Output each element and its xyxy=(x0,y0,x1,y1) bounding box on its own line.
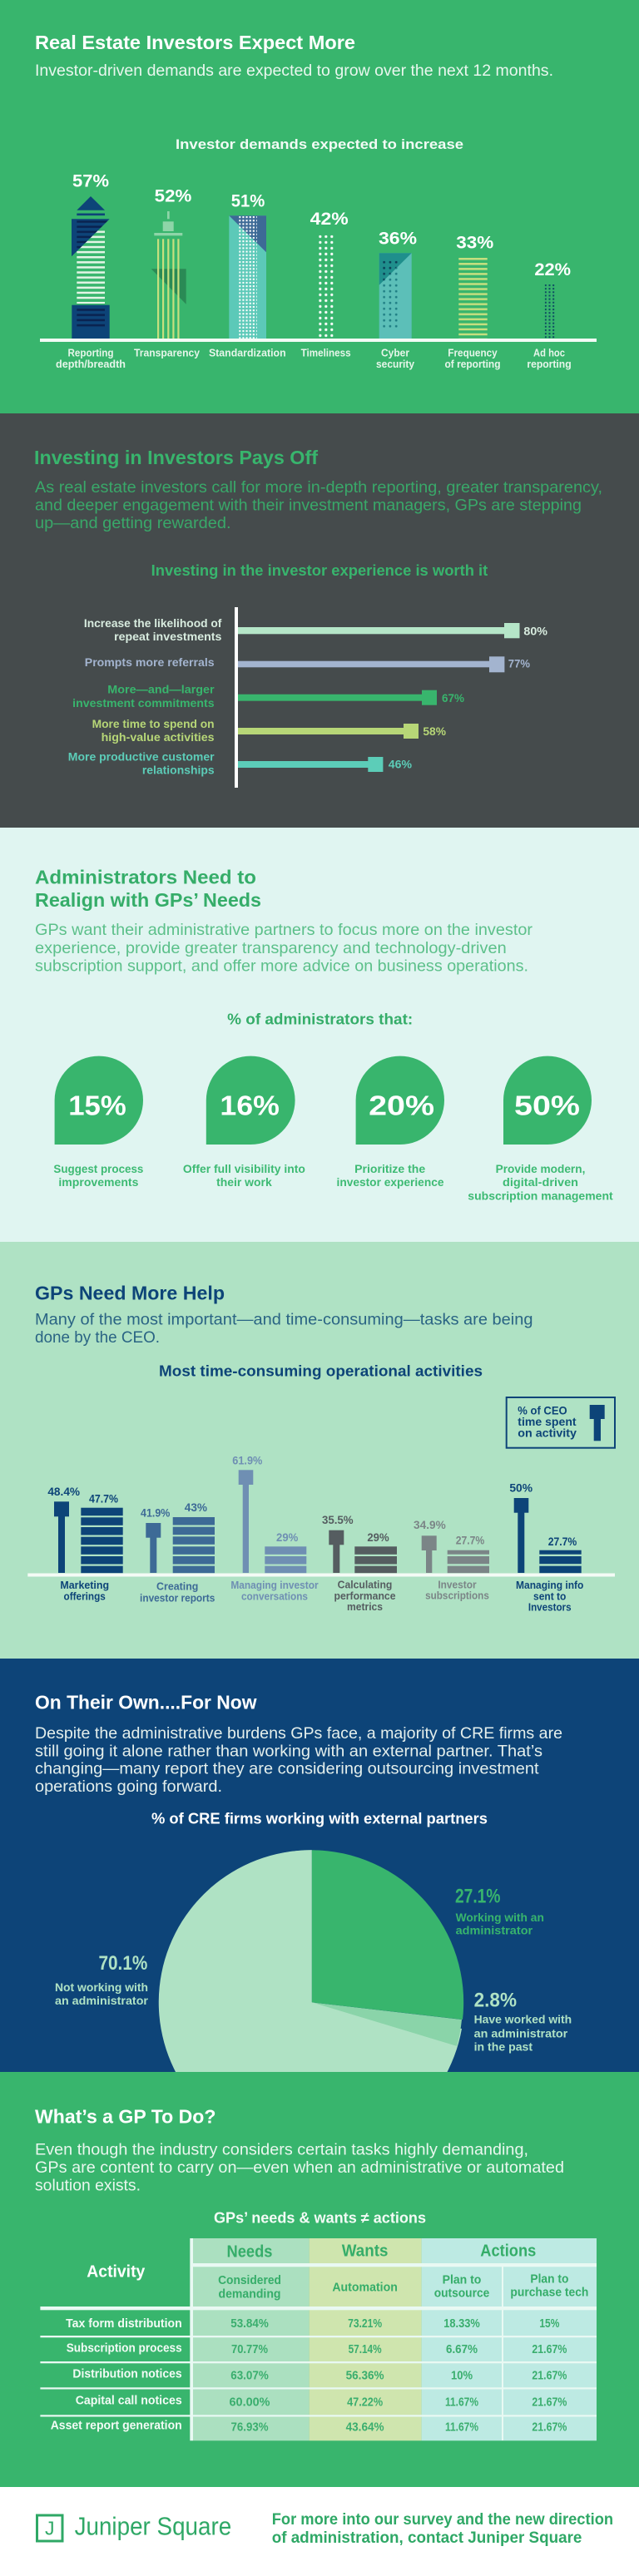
bars: managing investor conversations: 61.9% xyxy=(232,1453,263,1466)
bars: managing investor conversations: Managing investor xyxy=(230,1580,319,1591)
bars: managing info sent to investors: Investors xyxy=(528,1602,572,1614)
heading: investing in investors pays off: Investing in Investors Pays Off xyxy=(34,447,318,468)
legend: percent of CEO time: on activity xyxy=(518,1427,577,1440)
row values: 56.36% xyxy=(346,2370,384,2383)
intro text: experience, provide greater transparency and technology-driven xyxy=(35,939,507,957)
building bar: reporting depth/breadth 57%: 57% xyxy=(72,172,109,191)
column headers: outsource xyxy=(434,2287,489,2301)
heading: what's a GP to do: What’s a GP To Do? xyxy=(35,2106,216,2128)
stat: 20% prioritize investor experience: Prioritize the xyxy=(354,1163,426,1175)
bar: high-value activities 58%: 58% xyxy=(423,724,447,738)
bars: calculating performance metrics: 29% xyxy=(367,1530,389,1544)
building bar: transparency 52%: 52% xyxy=(155,186,192,205)
table grid lines xyxy=(40,2238,597,2440)
call to action: of administration, contact Juniper Square xyxy=(272,2529,582,2547)
row values: 47.22% xyxy=(347,2396,383,2409)
heading: administrators need to realign xyxy=(35,866,261,911)
bars: calculating performance metrics xyxy=(322,1513,397,1613)
call to action: For more into our survey and the new direction xyxy=(272,2511,613,2529)
bars: managing info sent to investors: sent to xyxy=(533,1590,567,1602)
bars: managing investor conversations: 29% xyxy=(276,1530,299,1544)
building bar: transparency 52% xyxy=(151,186,192,339)
building bar: standardization 51% xyxy=(229,192,266,339)
column headers: Plan to xyxy=(443,2274,482,2287)
bars: creating investor reports: 43% xyxy=(185,1501,208,1514)
bar: high-value activities 58%: More time to spend on xyxy=(92,718,215,730)
column headers: Needs xyxy=(226,2242,273,2261)
bar labels: depth/breadth xyxy=(56,358,126,370)
chart title: most time-consuming activities: Most time-consuming operational activities xyxy=(159,1362,483,1379)
stat: 16% full visibility xyxy=(183,1056,305,1189)
stat: 20% prioritize investor experience: 20% xyxy=(369,1090,434,1121)
striped bar: frequency of reporting 33%: 33% xyxy=(456,233,494,252)
stat: 15% suggest process improvements: improvements xyxy=(58,1176,138,1189)
panel: what's a GP to do xyxy=(0,2072,639,2487)
stat: 50% digital subscription management: Provide modern, xyxy=(496,1163,585,1175)
bars: managing info sent to investors: 27.7% xyxy=(548,1535,577,1548)
bar: customer relationships 46%: relationships xyxy=(142,764,215,776)
chart baseline xyxy=(27,1574,615,1577)
bar labels: Ad hoc xyxy=(533,348,565,359)
bar labels xyxy=(56,348,572,370)
bar labels: Standardization xyxy=(209,348,286,359)
pie label: 27.1% working with an administrator xyxy=(455,1885,544,1937)
intro text xyxy=(35,1311,532,1347)
bars: managing investor conversations: conversations xyxy=(241,1590,308,1602)
intro text: up—and getting rewarded. xyxy=(35,514,231,532)
intro text: GPs want their administrative partners to focus more on the investor xyxy=(35,921,533,939)
bar labels: Transparency xyxy=(134,348,200,359)
call to action xyxy=(272,2511,613,2547)
heading: on their own for now: On Their Own....For Now xyxy=(35,1691,257,1713)
row labels: Subscription process xyxy=(67,2341,182,2355)
intro text xyxy=(35,478,602,532)
row values: 70.77% xyxy=(231,2343,268,2356)
bar labels: Reporting xyxy=(68,348,113,359)
column headers: Activity xyxy=(87,2262,146,2281)
bars: calculating performance metrics: 35.5% xyxy=(322,1513,354,1526)
column headers: Wants xyxy=(342,2242,388,2261)
intro text: Despite the administrative burdens GPs face, a majority of CRE firms are xyxy=(35,1724,562,1743)
building bar: reporting depth/breadth 57% xyxy=(72,172,110,339)
panel: GPs need more help xyxy=(0,1242,639,1659)
row labels: Tax form distribution xyxy=(66,2317,182,2331)
bar: repeat investments 80%: Increase the likelihood of xyxy=(84,617,222,630)
logo: Juniper Square: Juniper Square xyxy=(75,2511,231,2540)
chart baseline xyxy=(40,339,597,342)
intro text xyxy=(35,1724,562,1796)
row labels: Asset report generation xyxy=(51,2420,182,2433)
stat: 16% full visibility: Offer full visibility into xyxy=(183,1163,305,1175)
dotted bar: ad hoc reporting 22%: 22% xyxy=(534,260,571,279)
intro text: and deeper engagement with their investment managers, GPs are stepping xyxy=(35,496,582,514)
bar: customer relationships 46% xyxy=(68,750,413,776)
row values: 43.64% xyxy=(346,2420,384,2434)
dotted bar: ad hoc reporting 22% xyxy=(534,260,571,339)
bar: investment commitments 67%: More—and—larger xyxy=(107,684,215,696)
pie label: 2.8% have worked with an administrator: an administrator xyxy=(474,2027,568,2040)
chart title: investor experience: Investing in the investor experience is worth it xyxy=(151,562,488,579)
bar: high-value activities 58% xyxy=(92,718,447,744)
row labels: Distribution notices xyxy=(72,2368,182,2381)
column headers: Automation xyxy=(332,2282,398,2295)
panel: on their own for now xyxy=(0,1659,639,2154)
stat: 50% digital subscription management xyxy=(468,1056,613,1202)
intro text: subscription support, and offer more advice on business operations. xyxy=(35,957,528,975)
pie label: 70.1% not working with an administrator: 70.1% xyxy=(98,1952,147,1975)
bars: managing investor conversations xyxy=(230,1453,319,1602)
stat: 50% digital subscription management: 50% xyxy=(514,1090,580,1121)
legend: percent of CEO time: time spent xyxy=(518,1416,577,1428)
bar: referrals 77%: 77% xyxy=(508,657,531,670)
row values: 21.67% xyxy=(532,2420,567,2434)
bars: creating investor reports xyxy=(140,1501,215,1604)
bar: repeat investments 80% xyxy=(84,617,548,643)
bars: managing info sent to investors: 50% xyxy=(509,1481,533,1494)
chart axis xyxy=(235,607,238,788)
row values: 18.33% xyxy=(443,2317,480,2331)
table title: GPs’ needs & wants ≠ actions xyxy=(214,2210,426,2227)
heading: GPs need more help: GPs Need More Help xyxy=(35,1283,225,1304)
panel: footer xyxy=(0,2487,639,2576)
bars: marketing offerings: 47.7% xyxy=(89,1492,118,1506)
bar labels: Timeliness xyxy=(301,348,351,359)
stat: 15% suggest process improvements: 15% xyxy=(68,1090,126,1121)
intro text: changing—many report they are considering outsourcing investment xyxy=(35,1760,539,1778)
actions column xyxy=(422,2238,597,2440)
bar labels: reporting xyxy=(527,358,572,370)
bars: marketing offerings: offerings xyxy=(64,1590,106,1602)
pie label: 2.8% have worked with an administrator: Have worked with xyxy=(474,2014,572,2026)
stat: 15% suggest process improvements: Suggest process xyxy=(53,1163,143,1175)
stat: 15% suggest process improvements xyxy=(53,1056,143,1189)
bars: marketing offerings: Marketing xyxy=(60,1580,109,1591)
legend: percent of CEO time xyxy=(507,1397,615,1448)
row labels: Capital call notices xyxy=(76,2395,182,2408)
bar: repeat investments 80%: 80% xyxy=(523,624,548,637)
bars: creating investor reports: Creating xyxy=(156,1581,198,1593)
row values: 6.67% xyxy=(446,2343,478,2356)
stat: 16% full visibility: their work xyxy=(216,1176,272,1189)
bar: customer relationships 46%: 46% xyxy=(389,758,413,771)
panel: administrators need to realign xyxy=(0,828,639,1242)
row values: 53.84% xyxy=(230,2317,269,2331)
bars: managing info sent to investors xyxy=(509,1481,584,1614)
bars: investor subscriptions xyxy=(414,1518,489,1602)
bars: creating investor reports: 41.9% xyxy=(141,1506,171,1519)
column headers: Considered xyxy=(218,2274,281,2287)
bars: calculating performance metrics: performance xyxy=(334,1590,396,1602)
striped bar: frequency of reporting 33% xyxy=(456,233,494,339)
legend: percent of CEO time: % of CEO xyxy=(518,1405,567,1417)
intro text: solution exists. xyxy=(35,2176,141,2194)
stat: 50% digital subscription management: subscription management xyxy=(468,1189,613,1202)
bars: investor subscriptions: 34.9% xyxy=(414,1518,446,1531)
table: needs, wants, actions xyxy=(40,2238,597,2440)
bar: investment commitments 67% xyxy=(72,684,465,710)
intro text: As real estate investors call for more in-depth reporting, greater transparency, xyxy=(35,478,602,497)
stat: 50% digital subscription management: digital-driven xyxy=(503,1176,578,1189)
panel: investing in investors pays off xyxy=(0,413,639,828)
wants column xyxy=(310,2238,422,2440)
intro text: Many of the most important—and time-consuming—tasks are being xyxy=(35,1311,532,1329)
bars: investor subscriptions: subscriptions xyxy=(425,1590,489,1602)
pie label: 2.8% have worked with an administrator xyxy=(474,1990,572,2054)
pie chart xyxy=(158,1850,464,2072)
intro text xyxy=(35,921,533,975)
pie label: 2.8% have worked with an administrator: 2.8% xyxy=(474,1990,517,2012)
pie label: 27.1% working with an administrator: Working with an xyxy=(456,1911,544,1924)
building bar: cyber security 36%: 36% xyxy=(379,229,417,248)
column headers: Plan to xyxy=(530,2272,569,2286)
stat: 20% prioritize investor experience: investor experience xyxy=(336,1176,444,1189)
building bar: standardization 51%: 51% xyxy=(231,192,265,211)
row values: 60.00% xyxy=(230,2396,270,2409)
bars: investor subscriptions: Investor xyxy=(438,1579,477,1590)
stat: 20% prioritize investor experience xyxy=(336,1056,444,1189)
bars: marketing offerings xyxy=(47,1485,123,1602)
column headers: Actions xyxy=(480,2242,536,2261)
row values: 73.21% xyxy=(348,2317,382,2331)
chart title: investor demands: Investor demands expected to increase xyxy=(176,136,463,152)
intro text: Investor-driven demands are expected to grow over the next 12 months. xyxy=(35,62,553,80)
pie label: 27.1% working with an administrator: 27.1% xyxy=(455,1885,500,1907)
bar labels: security xyxy=(376,358,414,370)
row values: 76.93% xyxy=(231,2420,269,2434)
bar: referrals 77%: Prompts more referrals xyxy=(85,656,215,669)
pie label: 2.8% have worked with an administrator: in the past xyxy=(474,2041,533,2054)
row values: 21.67% xyxy=(532,2396,567,2409)
bars: managing info sent to investors: Managing info xyxy=(516,1580,584,1591)
column headers: purchase tech xyxy=(510,2286,588,2299)
chart title: percent of administrators: % of administrators that: xyxy=(227,1011,413,1028)
column headers xyxy=(87,2242,588,2301)
row values: 21.67% xyxy=(532,2343,567,2356)
intro text: Even though the industry considers certain tasks highly demanding, xyxy=(35,2140,528,2158)
pie label: 70.1% not working with an administrator xyxy=(55,1952,149,2007)
intro text xyxy=(35,2140,564,2194)
heading: administrators need to realign: Realign with GPs’ Needs xyxy=(35,889,261,911)
bars: investor subscriptions: 27.7% xyxy=(456,1534,485,1547)
row values: 10% xyxy=(451,2370,473,2383)
row values xyxy=(230,2317,567,2434)
row labels xyxy=(51,2317,182,2433)
bars: marketing offerings: 48.4% xyxy=(47,1485,81,1498)
bar: investment commitments 67%: 67% xyxy=(442,691,465,705)
building bar: cyber security 36% xyxy=(379,229,417,339)
row values: 15% xyxy=(539,2317,559,2331)
row values: 63.07% xyxy=(230,2370,269,2383)
panel: real estate investors expect more xyxy=(0,0,639,413)
pie label: 70.1% not working with an administrator: an administrator xyxy=(55,1995,149,2007)
bars: calculating performance metrics: Calculating xyxy=(338,1580,392,1591)
bars: creating investor reports: investor reports xyxy=(140,1592,215,1604)
pie label: 27.1% working with an administrator: administrator xyxy=(456,1925,533,1937)
heading: administrators need to realign: Administrators Need to xyxy=(35,866,256,888)
column headers: demanding xyxy=(218,2287,281,2301)
intro text: done by the CEO. xyxy=(35,1328,160,1347)
pie label: 70.1% not working with an administrator: Not working with xyxy=(55,1981,148,1994)
chart title: CRE firms with external partners: % of CRE firms working with external partners xyxy=(151,1811,488,1827)
row values: 57.14% xyxy=(349,2343,382,2356)
bar: high-value activities 58%: high-value activities xyxy=(102,731,215,744)
row values: 11.67% xyxy=(445,2420,478,2434)
needs column xyxy=(193,2238,310,2440)
bars: calculating performance metrics: metrics xyxy=(347,1601,383,1613)
bar: referrals 77% xyxy=(85,656,531,672)
bar labels: of reporting xyxy=(444,358,501,370)
bar: repeat investments 80%: repeat investments xyxy=(114,630,221,643)
bar labels: Cyber xyxy=(381,348,409,359)
heading: real estate investors expect more: Real Estate Investors Expect More xyxy=(35,32,355,53)
dotted bar: timeliness 42% xyxy=(310,210,349,339)
intro text: operations going forward. xyxy=(35,1777,222,1796)
bar: investment commitments 67%: investment commitments xyxy=(72,697,215,710)
bar labels: Frequency xyxy=(448,348,498,359)
logo: Juniper Square: J xyxy=(45,2517,54,2539)
dotted bar: timeliness 42%: 42% xyxy=(310,210,349,229)
intro text: still going it alone rather than working with an external partner. That’s xyxy=(35,1742,542,1760)
intro text: GPs are content to carry on—even when an administrative or automated xyxy=(35,2158,564,2177)
row values: 21.67% xyxy=(532,2370,567,2383)
row values: 11.67% xyxy=(445,2396,478,2409)
bar: customer relationships 46%: More productive customer xyxy=(68,750,215,763)
stat: 16% full visibility: 16% xyxy=(220,1090,280,1121)
